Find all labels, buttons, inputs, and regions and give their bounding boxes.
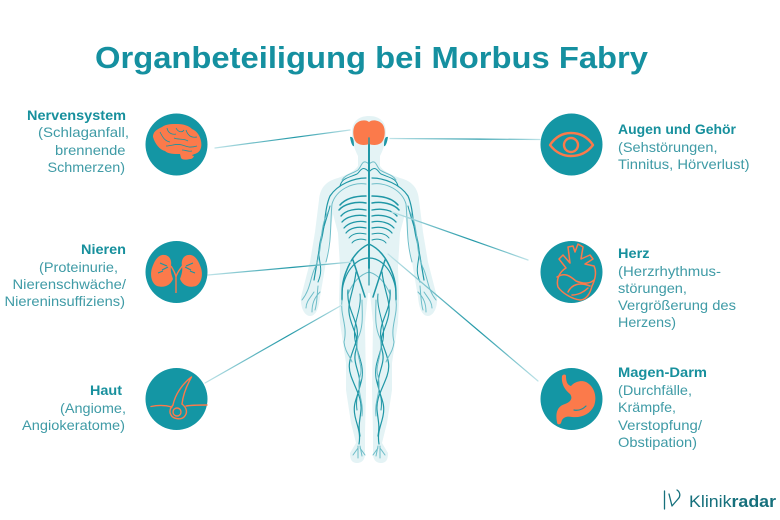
text: Nieren: Nieren bbox=[81, 241, 126, 257]
text: Magen-Darm bbox=[618, 364, 707, 450]
text: Magen-Darm: Obstipation) bbox=[618, 434, 697, 450]
icon: eye bbox=[540, 114, 602, 176]
text: Magen-Darm: Krämpfe, bbox=[618, 399, 676, 415]
ears bbox=[350, 137, 388, 146]
text: Nervensystem: brennende bbox=[55, 142, 126, 158]
body figure with nervous system bbox=[301, 116, 437, 463]
text: Magen-Darm: (Durchfälle, bbox=[618, 382, 692, 398]
text: Augen und Gehör bbox=[618, 121, 750, 172]
icon: heart bbox=[540, 241, 602, 303]
text: Magen-Darm: Verstopfung/ bbox=[618, 417, 702, 433]
text: Haut: Haut bbox=[90, 382, 122, 398]
text: Nervensystem: (Schlaganfall, bbox=[38, 124, 129, 140]
icon: brain bbox=[146, 114, 208, 176]
text: Herz: störungen, bbox=[618, 280, 687, 296]
text: Haut: Angiokeratome) bbox=[22, 417, 125, 433]
brain in head bbox=[353, 120, 385, 145]
text: Herz: Herz bbox=[618, 245, 650, 261]
logo: Klinikradar: Klinikradar bbox=[689, 492, 776, 511]
text: Augen und Gehör: Tinnitus, Hörverlust) bbox=[618, 156, 750, 172]
text: Nieren bbox=[4, 241, 126, 309]
text: Nervensystem bbox=[27, 107, 129, 175]
icon: hair and skin bbox=[146, 368, 208, 430]
text: Herz bbox=[618, 245, 736, 330]
text: Herz: (Herzrhythmus- bbox=[618, 263, 721, 279]
text: Herz: Vergrößerung des bbox=[618, 297, 736, 313]
connector lines bbox=[205, 130, 540, 383]
text: Herz: Herzens) bbox=[618, 314, 676, 330]
logo: Klinikradar bbox=[664, 490, 776, 511]
text: Nieren: Nierenschwäche/ bbox=[12, 276, 126, 292]
icon: kidneys bbox=[146, 241, 208, 303]
title: Organbeteiligung bei Morbus Fabry bbox=[95, 40, 649, 75]
text: Nieren: Niereninsuffiziens) bbox=[4, 293, 125, 309]
icon: stomach bbox=[540, 368, 602, 430]
text: Haut: (Angiome, bbox=[60, 400, 126, 416]
text: Magen-Darm: Magen-Darm bbox=[618, 364, 707, 380]
text: Nervensystem: Nervensystem bbox=[27, 107, 126, 123]
text: Nervensystem: Schmerzen) bbox=[48, 159, 125, 175]
spinal cord bbox=[368, 140, 370, 268]
text: Nieren: (Proteinurie, bbox=[39, 259, 118, 275]
text: Augen und Gehör: (Sehstörungen, bbox=[618, 139, 718, 155]
text: Haut bbox=[22, 382, 126, 433]
text: Augen und Gehör: Augen und Gehör bbox=[618, 121, 737, 137]
